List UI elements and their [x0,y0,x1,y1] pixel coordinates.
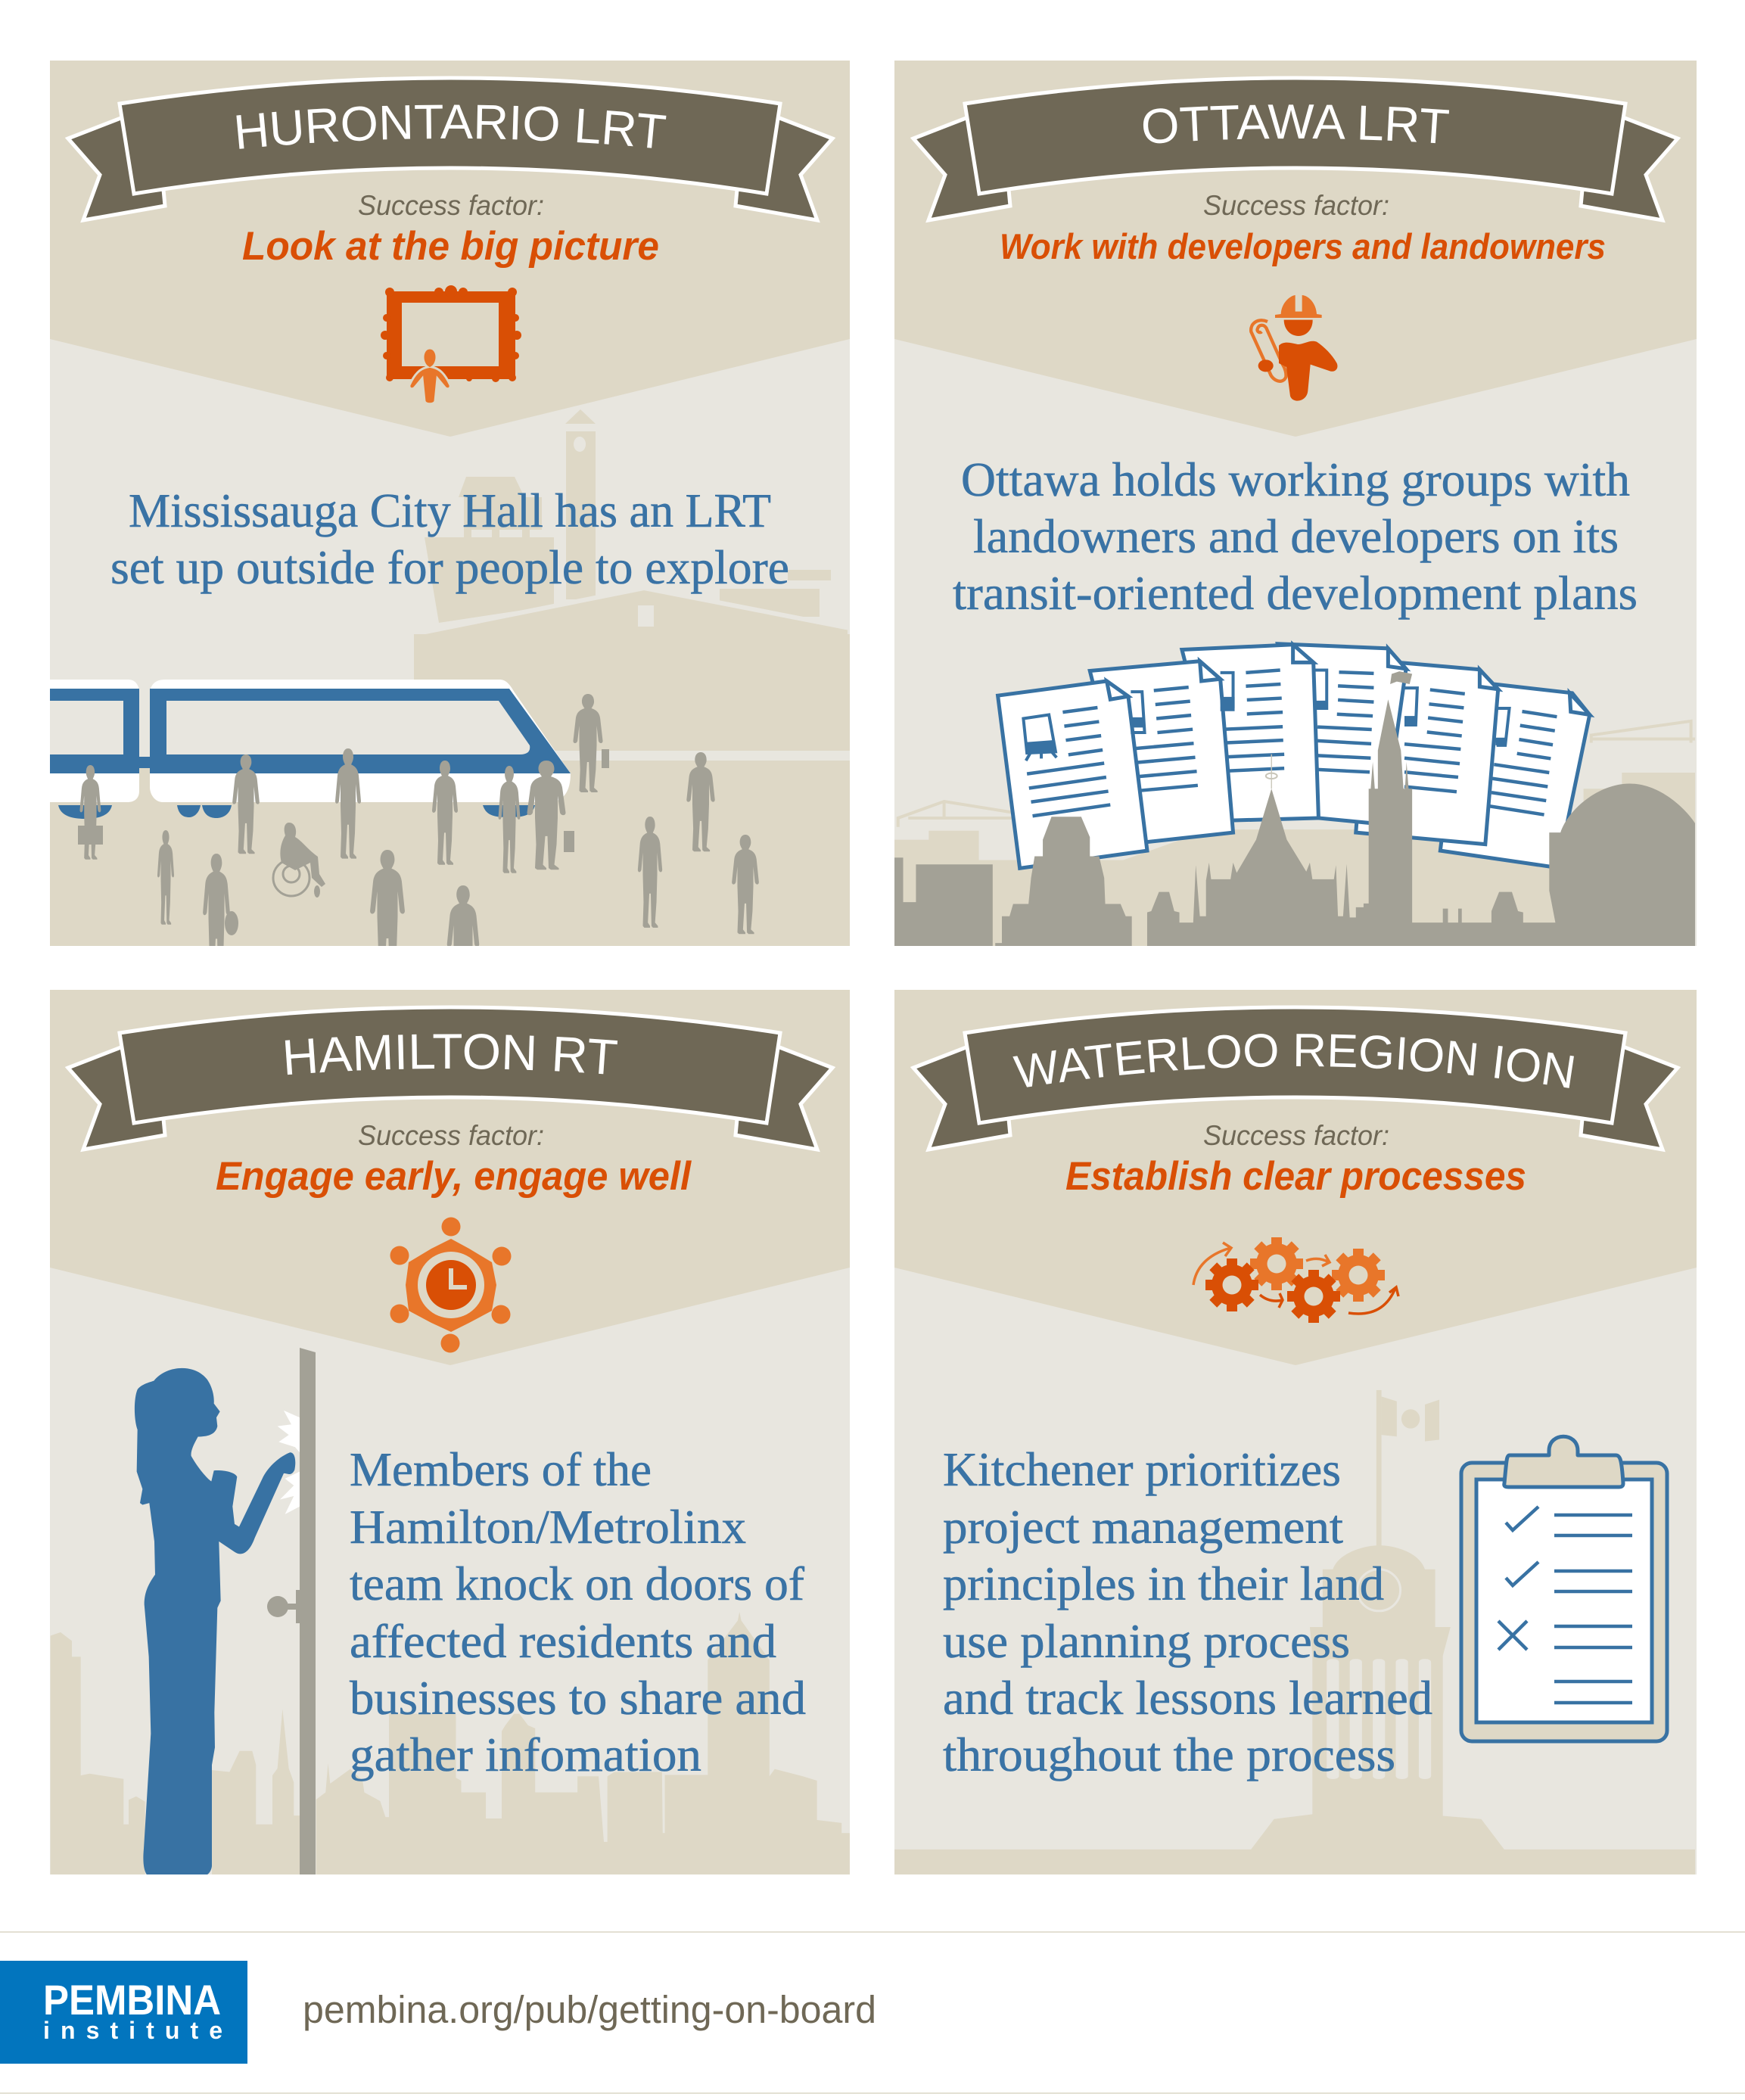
text: description [953,453,1638,620]
panel: Hurontario LRT [50,61,850,946]
text: description [350,1443,806,1781]
illustration: knock burst [278,1411,300,1514]
label: success factor: Success factor: [358,1120,544,1151]
banner: title: OTTAWA LRT [1143,104,1450,144]
text: description: Hamilton/Metrolinx [350,1501,746,1554]
text: description: gather infomation [350,1728,701,1781]
illustration: woman knocking [135,1368,295,1877]
label: success factor: Success factor: [1203,1120,1389,1151]
icon: picture frame [381,285,521,404]
background: tan city and cranes [894,721,1695,949]
label: success factor: Success factor: [358,190,544,221]
banner: title [65,76,835,222]
illustration: Parliament skyline [894,671,1695,949]
text: description: use planning process [943,1615,1350,1668]
banner: title [910,1005,1681,1152]
icon: clock with people around it [390,1217,512,1353]
banner: title: HURONTARIO LRT [236,104,666,149]
icon: gears and arrows [1193,1237,1398,1323]
text: description: landowners and developers on its [973,510,1619,563]
heading: factor: Establish clear processes [1065,1154,1526,1199]
footer rule bottom [0,2092,1745,2094]
logo: Pembina Institute [0,1961,247,2064]
heading: factor: Engage early, engage well [216,1154,692,1199]
footer url: pembina.org/pub/getting-on-board [303,1988,876,2031]
footer rule top [0,1931,1745,1933]
banner: title [910,76,1681,222]
chevron header [50,990,850,1365]
illustration: door [267,1348,316,1875]
heading: factor: Work with developers and landowners [1000,226,1606,266]
chevron header [894,990,1697,1365]
text: description: throughout the process [943,1728,1395,1781]
text: description: Members of the [350,1443,652,1496]
icon: construction worker [1251,295,1337,401]
text: description: principles in their land [943,1557,1384,1610]
illustration: stack of documents [998,644,1590,868]
icon: clipboard checklist [1461,1436,1667,1741]
background: Hamilton skyline [51,1612,850,1877]
text: description: project management [943,1501,1344,1554]
banner: title: WATERLOO REGION ION [1012,1034,1574,1088]
banner: title: HAMILTON RT [285,1034,617,1075]
text: description: transit-oriented development plans [953,567,1638,620]
illustration: train [50,680,571,819]
text: description: Ottawa holds working groups with [961,453,1630,506]
background: Kitchener city hall tower [894,1390,1695,1877]
panel: Hamilton RT [50,990,850,1874]
heading: factor: Look at the big picture [242,224,659,269]
text: description: set up outside for people to explore [110,541,789,594]
text: description: Mississauga City Hall has an LRT [129,484,771,537]
text: description: affected residents and [350,1615,776,1668]
panel: Waterloo Region ION [894,990,1697,1874]
logo: Pembina Institute: institute [43,2017,222,2044]
label: success factor: Success factor: [1203,190,1389,221]
text: description: businesses to share and [350,1672,806,1725]
text: description: team knock on doors of [350,1557,804,1610]
text: description: and track lessons learned [943,1672,1432,1725]
chevron header [50,61,850,437]
text: description [943,1443,1432,1781]
banner: title [65,1005,835,1152]
chevron header [894,61,1697,437]
illustration: crowd of people [78,694,759,946]
panel: Ottawa LRT [894,61,1697,946]
logo: Pembina Institute: PEMBINA [43,1976,221,2024]
text: description [110,484,789,594]
background: Mississauga City Hall [50,409,850,946]
text: description: Kitchener prioritizes [943,1443,1341,1496]
